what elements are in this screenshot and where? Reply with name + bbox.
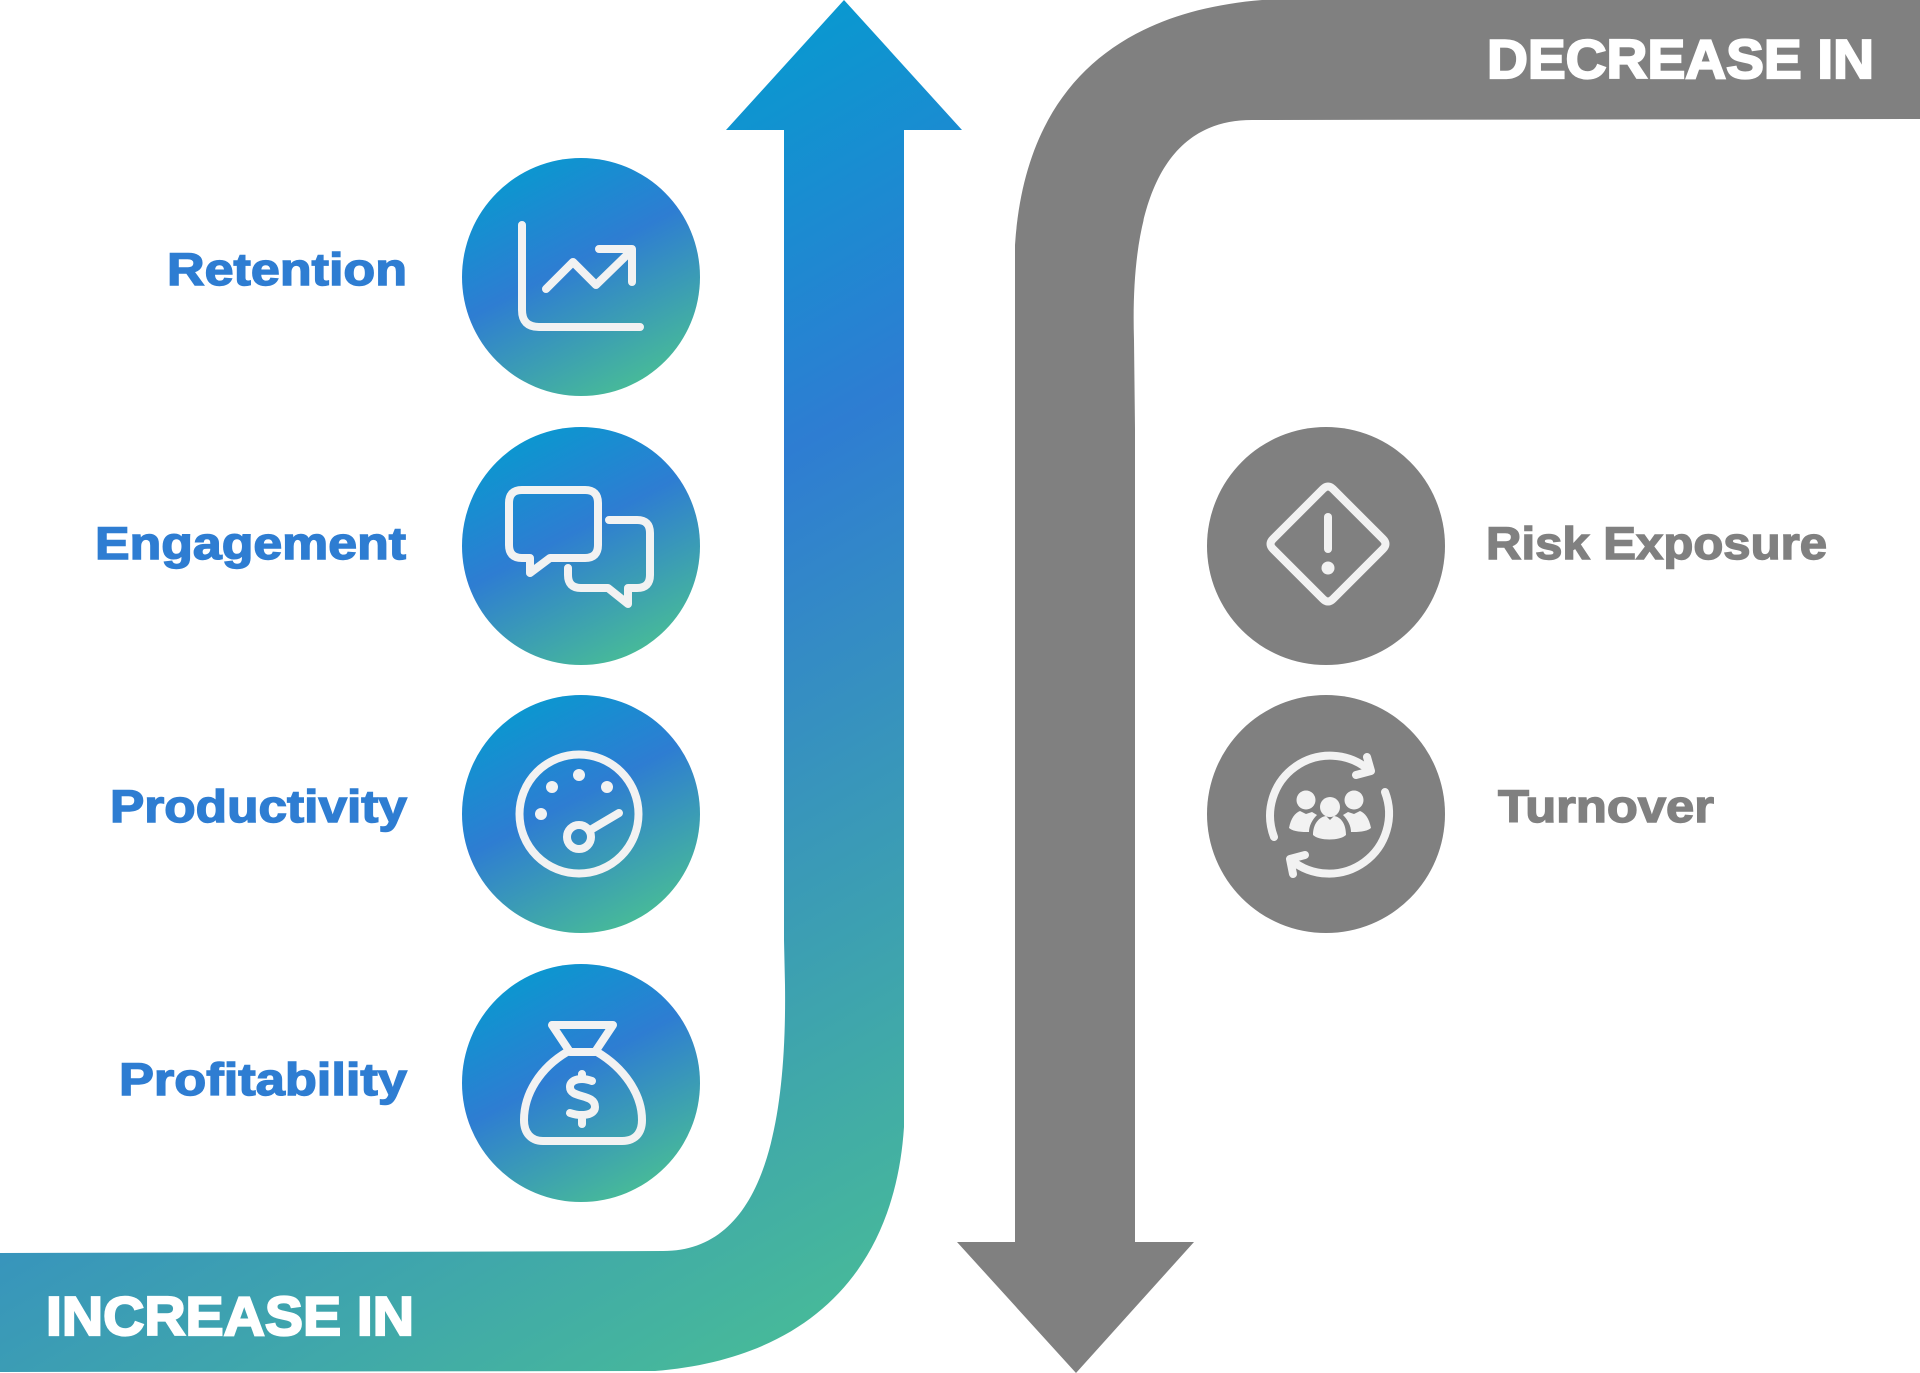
circle icon: risk warning diamond [1207,427,1445,665]
label: productivity: Productivity [110,781,407,832]
circle icon: turnover people cycle [1207,695,1445,933]
label: retention: Retention [167,244,407,295]
circle icon: productivity gauge [462,695,700,933]
label: engagement: Engagement [95,518,406,569]
circle icon: engagement chat bubbles [462,427,700,665]
label: risk exposure: Risk Exposure [1486,518,1827,569]
label: turnover: Turnover [1498,781,1714,832]
circle icon: profitability money bag [462,964,700,1202]
label: profitability: Profitability [119,1054,407,1105]
heading: increase in: INCREASE IN [46,1285,414,1347]
arrow: increase (gradient, pointing up) [0,0,962,1372]
arrow: decrease (grey, pointing down) [957,0,1920,1373]
heading: decrease in: DECREASE IN [1487,28,1874,90]
circle icon: retention chart [462,158,700,396]
